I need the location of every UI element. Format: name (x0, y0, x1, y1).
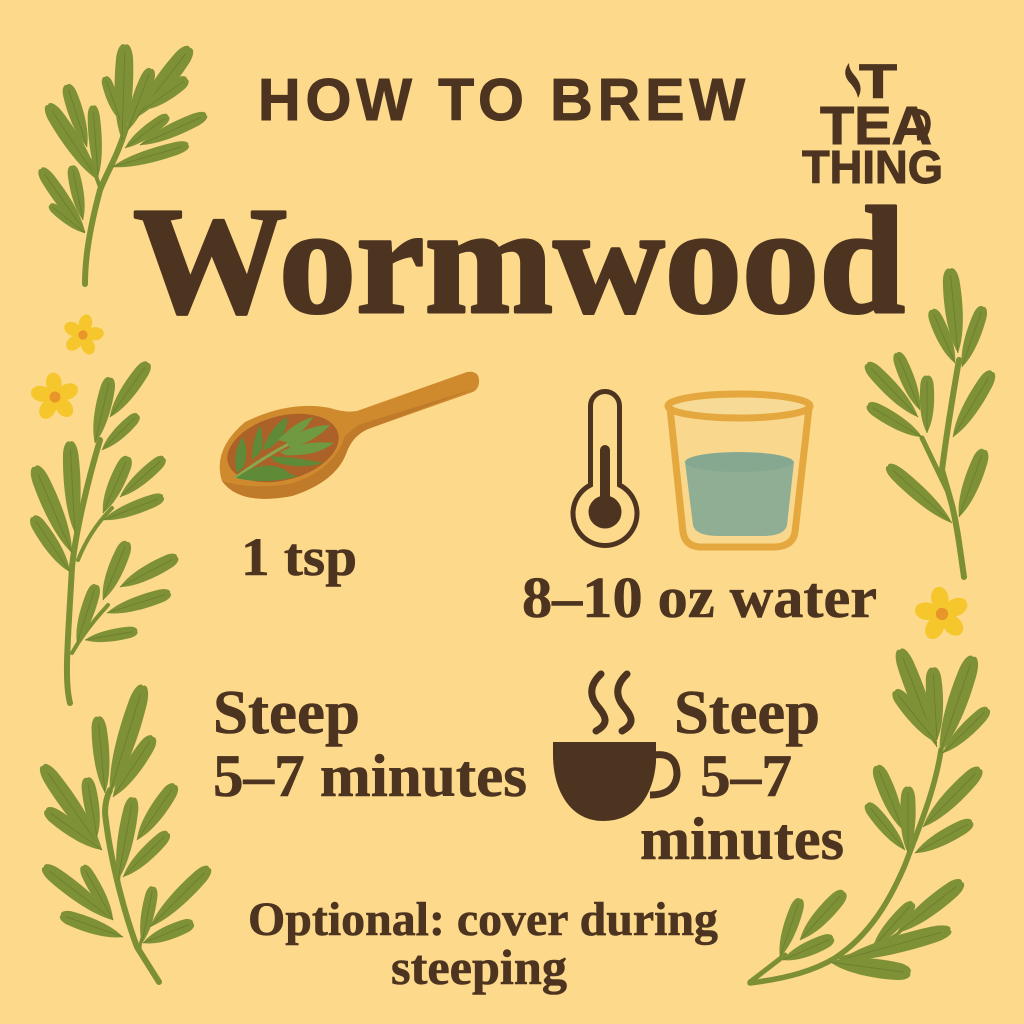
heading: how to brew: HOW TO BREW (258, 67, 745, 133)
title: wormwood: Wormwood (133, 177, 905, 346)
sprig: top left (35, 42, 209, 284)
icon: steaming cup (553, 674, 677, 821)
flower: right (910, 583, 974, 645)
note: optional cover (248, 893, 718, 995)
cup body (553, 742, 656, 821)
icon: thermometer (573, 392, 637, 546)
sprig: middle right (861, 267, 999, 577)
flower: lower left (27, 370, 83, 424)
label: steep right: Steep (674, 679, 820, 747)
water (685, 453, 794, 536)
logo cup handle (914, 112, 928, 138)
label: steep left: Steep (213, 679, 360, 747)
sprig: bottom left (35, 682, 215, 982)
steam (592, 674, 605, 731)
sprig: bottom right (750, 646, 994, 983)
logo swirl (845, 63, 861, 98)
label: steep left: 5–7 minutes (213, 743, 527, 809)
label: steep left (213, 679, 527, 809)
label: steep right: 5–7 (700, 743, 792, 809)
glass rim (668, 394, 810, 418)
cup handle (650, 755, 677, 795)
logo word: tea: TEA (820, 96, 932, 156)
flower: upper left (57, 310, 109, 360)
logo word: thing: THING (802, 141, 943, 193)
note: optional cover: Optional: cover during (248, 893, 718, 946)
label: water amount: 8–10 oz water (522, 565, 877, 630)
sprig: middle left (26, 358, 181, 703)
herb sprig in spoon (235, 417, 334, 481)
label: steep right: minutes (640, 806, 844, 872)
icon: wooden spoon with herbs (220, 372, 479, 499)
logo: st tea thing (802, 56, 943, 193)
logo word: st: T (859, 56, 897, 109)
label: 1 tsp: 1 tsp (241, 527, 357, 587)
label: steep right (640, 679, 844, 872)
icon: glass of water (668, 394, 810, 547)
note: optional cover: steeping (391, 939, 567, 995)
